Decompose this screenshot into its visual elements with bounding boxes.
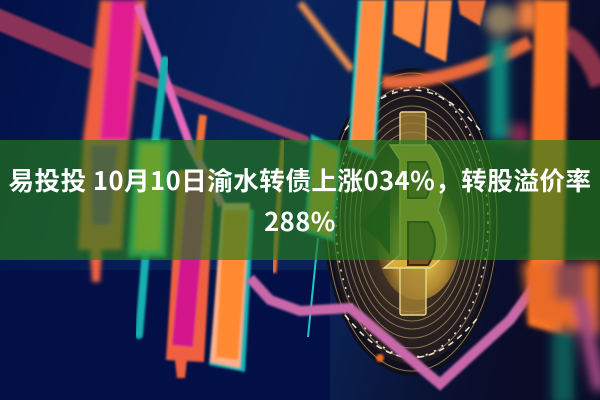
dark engraving left of B: [360, 185, 390, 255]
engraved white flecks: [336, 87, 488, 358]
candlestick: orange centre: [209, 203, 254, 372]
candlestick: magenta centre: [166, 115, 215, 378]
pink lower trend line: [250, 265, 550, 384]
orange coin spot: [376, 354, 384, 362]
blurred upper right marks: [484, 0, 538, 147]
orange pink band top right: [300, 3, 600, 85]
orange thin wick: [274, 140, 283, 273]
top hanging candles: [393, 0, 486, 62]
pink diagonal line: [138, 5, 222, 205]
teal-edged striped candle: [304, 134, 341, 242]
title: [9, 161, 591, 239]
orange tall candle centre: [348, 0, 387, 160]
title: 易投投 10月10日渝水转债上涨034%，转股溢价率: [9, 161, 591, 198]
bitcoin B symbol: [384, 112, 446, 315]
tall orange candle right: [528, 0, 568, 335]
pink trend line upper left: [0, 18, 305, 140]
bitcoin coin: [324, 68, 500, 376]
blurred lower right candles: [522, 262, 600, 400]
candlestick: yellow-green: [128, 140, 170, 257]
thin teal wick: [308, 238, 318, 337]
teal wick: [139, 60, 165, 335]
candlestick: magenta left: [78, 0, 146, 282]
title band: [0, 140, 600, 260]
title: 288%: [264, 202, 336, 239]
